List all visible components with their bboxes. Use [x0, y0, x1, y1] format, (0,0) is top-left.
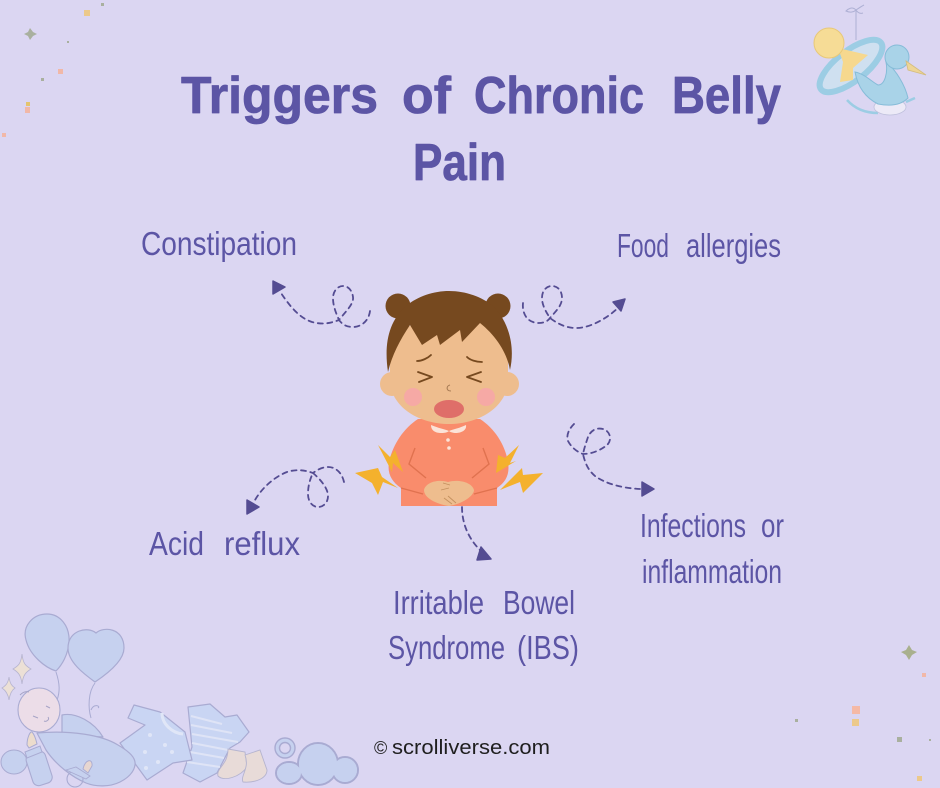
hands [424, 481, 474, 506]
back lump [1, 750, 27, 774]
illustration: child holding belly [355, 291, 543, 506]
title [181, 67, 781, 192]
label: Acid reflux: Acid [149, 525, 204, 562]
title: of [402, 67, 452, 125]
nose [447, 385, 451, 391]
label: Infections or inflammation: Infections [640, 507, 746, 544]
pacifier [66, 761, 92, 787]
decoration: sparkles, upper left [2, 3, 104, 137]
label: Constipation: Constipation [141, 225, 297, 262]
pacifier ring [812, 31, 890, 101]
decoration: baby items, lower left [1, 614, 358, 787]
cheeks [404, 388, 495, 406]
baby head [18, 688, 60, 732]
face [390, 318, 508, 424]
label: Infections or inflammation [640, 507, 784, 590]
label: Irritable Bowel Syndrome (IBS): (IBS) [517, 629, 579, 666]
label: Irritable Bowel Syndrome (IBS): Irritable [393, 584, 484, 621]
hair buns [386, 294, 510, 318]
duck body [855, 62, 908, 105]
duck beak [906, 61, 926, 75]
striped onesie [183, 704, 249, 782]
rattle ring [275, 738, 295, 758]
arrow: to Irritable Bowel Syndrome [462, 507, 491, 560]
title: Triggers [181, 67, 378, 125]
footer: copyright: © [374, 738, 387, 758]
footer: copyright: scrolliverse.com [392, 737, 550, 759]
eyes [418, 372, 481, 382]
pacifier strap [847, 98, 915, 113]
balloon: round [25, 614, 69, 671]
label: Irritable Bowel Syndrome (IBS): Syndrome [388, 629, 505, 666]
blanket main [37, 732, 135, 786]
arm creases [401, 448, 497, 494]
ribbon [846, 5, 864, 40]
pain bolts [355, 445, 543, 495]
arrow: to Constipation [273, 281, 370, 327]
cloud [276, 743, 358, 785]
dotted onesie [120, 705, 192, 780]
onesie collar [162, 713, 183, 734]
balloon: heart [68, 629, 124, 682]
pacifier ball [814, 28, 844, 58]
label: Infections or inflammation: or [761, 507, 784, 544]
label: Infections or inflammation: inflammation [642, 553, 782, 590]
mouth [434, 400, 464, 418]
buttons [446, 438, 451, 450]
duck head [885, 45, 909, 69]
ears [380, 372, 519, 396]
collar [431, 425, 466, 433]
arrow: to Acid reflux [247, 467, 344, 514]
arrow: to Food allergies [523, 286, 625, 328]
label: Acid reflux: reflux [224, 525, 300, 562]
booties [218, 749, 267, 782]
bottle [25, 732, 54, 787]
eyebrows [417, 355, 482, 362]
body [389, 419, 509, 506]
label: Irritable Bowel Syndrome (IBS): Bowel [503, 584, 575, 621]
label: Food allergies [617, 227, 781, 264]
decoration: sparkles, lower right [795, 645, 931, 781]
label: Food allergies: Food [617, 227, 669, 264]
pacifier handle [838, 48, 868, 82]
blanket upper [62, 714, 103, 737]
sparkles [2, 654, 31, 700]
label: Irritable Bowel Syndrome (IBS) [388, 584, 579, 666]
diaper [874, 99, 906, 115]
baby face [20, 692, 50, 721]
label: Food allergies: allergies [686, 227, 781, 264]
title: Pain [413, 134, 506, 192]
label: Acid reflux [149, 525, 300, 562]
title: Chronic [474, 67, 644, 125]
arrow: to Infections or inflammation [567, 424, 654, 496]
decoration: pacifier and duck [812, 5, 926, 115]
hair [387, 291, 512, 372]
title: Belly [672, 67, 781, 125]
